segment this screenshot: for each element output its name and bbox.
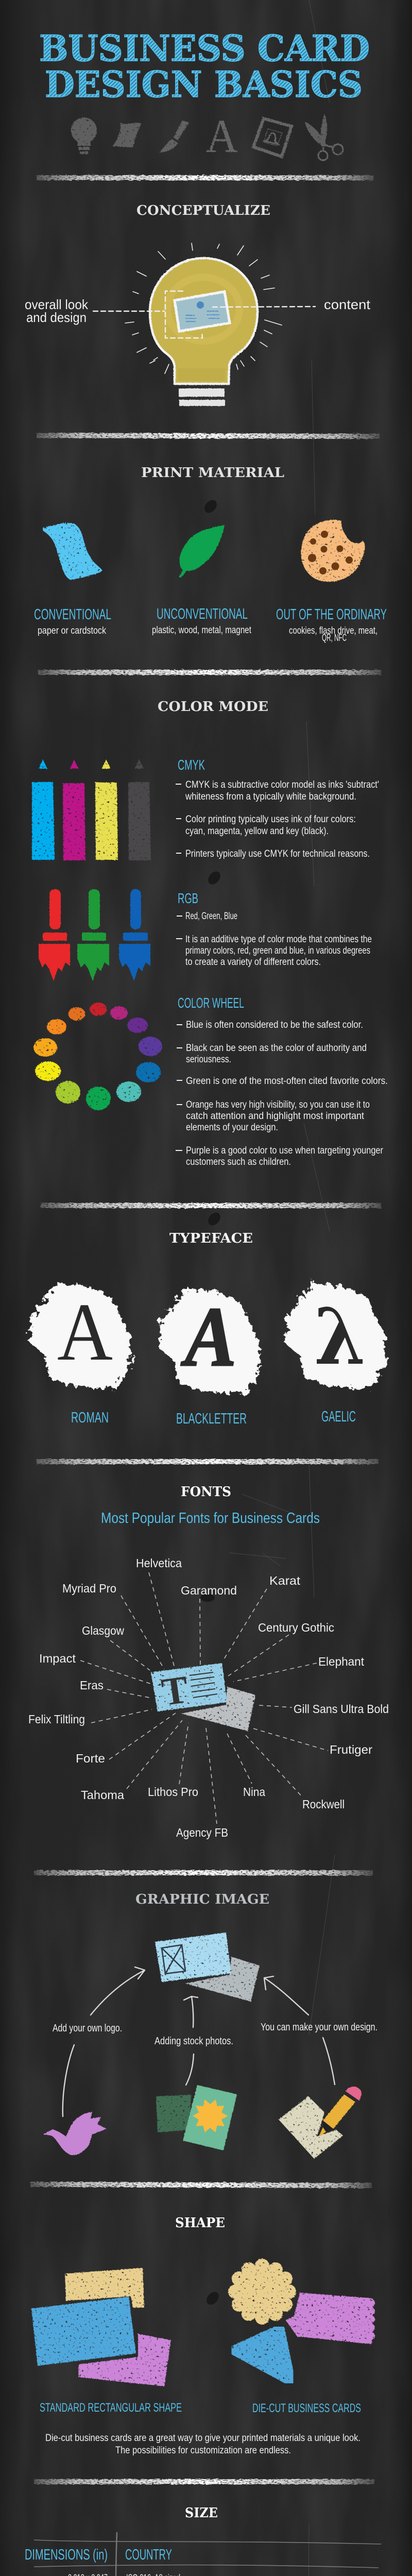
- text: color wheel: Orange has very high visibility, so you can use it to: [186, 1099, 370, 1110]
- text: RGB: [176, 890, 372, 968]
- icon: letter A: A: [206, 110, 238, 162]
- chalk blob: roman: [28, 1283, 131, 1388]
- font name labels: Tahoma: [81, 1788, 124, 1802]
- font name labels: Felix Tiltling: [28, 1713, 85, 1726]
- label: content: content: [324, 297, 371, 312]
- label: conventional: CONVENTIONAL: [34, 606, 111, 623]
- label: you can make your own design: You can make your own design.: [261, 2022, 377, 2033]
- heading: shape: SHAPE: [175, 2215, 225, 2231]
- heading: graphic image: GRAPHIC IMAGE: [135, 1892, 269, 1907]
- table rules: [34, 2532, 386, 2576]
- arrow: photos to card: [184, 1996, 198, 2085]
- font name labels: Rockwell: [302, 1798, 345, 1811]
- heading: color mode: COLOR MODE: [158, 699, 268, 715]
- label: adding stock photos: Adding stock photos.: [154, 2036, 233, 2047]
- icon: cookie: [301, 520, 365, 582]
- bulb rays: [125, 243, 282, 374]
- icon: stock photos: [156, 2085, 237, 2150]
- radial dashed lines: [80, 1572, 328, 1824]
- text block: die-cut description: [45, 2433, 360, 2456]
- label: conventional: [34, 606, 111, 636]
- card inside bulb: [175, 292, 230, 331]
- font name labels: Myriad Pro: [62, 1582, 116, 1595]
- label: gaelic: GAELIC: [321, 1409, 356, 1425]
- chalk blob: roman: A: [57, 1286, 113, 1378]
- text: CMYK: [176, 757, 379, 859]
- dashed callouts: [93, 291, 315, 338]
- panel: print material: [34, 465, 387, 643]
- font name labels: Agency FB: [176, 1826, 228, 1839]
- heading: size: SIZE: [185, 2505, 218, 2521]
- illustration: die-cut cards: [228, 2259, 375, 2380]
- text: color wheel: Black can be seen as the color of authority and: [186, 1043, 367, 1054]
- heading: conceptualize: CONCEPTUALIZE: [136, 203, 270, 218]
- label: overall look and design: overall look: [25, 297, 89, 312]
- text: CMYK: cyan, magenta, yellow and key (black).: [185, 826, 329, 837]
- panel: shape: [31, 2215, 375, 2456]
- label: out of the ordinary: cookies, flash drive, meat,: [289, 625, 377, 636]
- label: conventional: paper or cardstock: [38, 625, 106, 636]
- font name labels: [28, 1556, 389, 1839]
- label: unconventional: [152, 606, 252, 636]
- text: color wheel: catch attention and highlight most important: [186, 1111, 365, 1122]
- icon: CMYK pencils: [32, 759, 151, 860]
- icon: bird logo: [43, 2112, 107, 2155]
- text: RGB: It is an additive type of color mode that combines the: [185, 934, 372, 945]
- font name labels: Lithos Pro: [148, 1785, 198, 1799]
- text: RGB: RGB: [178, 890, 198, 906]
- arrow: logo to card: [63, 1967, 145, 2116]
- icon: business cards with T: [151, 1663, 255, 1731]
- font name labels: Eras: [80, 1679, 104, 1692]
- label: out of the ordinary: QR, NFC: [322, 633, 347, 643]
- icon row: section icons: [71, 110, 343, 162]
- icon: light bulb with business card: [150, 258, 258, 406]
- chalk blob: blackletter: A: [181, 1290, 236, 1384]
- text: color wheel: seriousness.: [186, 1054, 231, 1065]
- icon: blank business cards: [155, 1933, 260, 2002]
- table: dimensions by country: COUNTRY: [125, 2547, 172, 2563]
- text: CMYK: CMYK: [178, 757, 205, 773]
- label: overall look and design: and design: [26, 310, 87, 325]
- illustration: standard rectangular cards: [31, 2268, 171, 2386]
- text: color wheel: elements of your design.: [186, 1122, 278, 1133]
- text: color wheel: [176, 995, 388, 1167]
- arrow: design to card: [264, 1976, 335, 2084]
- icon: leaf: [179, 525, 225, 578]
- panel: size: [25, 2505, 386, 2576]
- icon: business cards with T: T: [159, 1668, 191, 1714]
- table: dimensions by country: [25, 2532, 386, 2576]
- label: add your own logo: Add your own logo.: [53, 2023, 122, 2034]
- font name labels: Elephant: [318, 1655, 365, 1668]
- text block: die-cut description: Die-cut business cards are a great way to give your printed materials a unique look.: [45, 2433, 360, 2444]
- text: color wheel: Purple is a good color to use when targeting younger: [186, 1145, 384, 1156]
- font name labels: Forte: [76, 1752, 105, 1765]
- icon: pencil and paper: [279, 2087, 362, 2159]
- font name labels: Impact: [39, 1652, 76, 1665]
- text: color wheel: Green is one of the most-often cited favorite colors.: [186, 1076, 388, 1087]
- text: color wheel: Blue is often considered to be the safest color.: [186, 1020, 363, 1030]
- label: out of the ordinary: [276, 606, 387, 643]
- icon: brush: [159, 121, 189, 152]
- heading: print material: PRINT MATERIAL: [141, 465, 284, 481]
- font name labels: Frutiger: [330, 1743, 372, 1756]
- font name labels: Century Gothic: [258, 1621, 334, 1634]
- bulb base: [179, 388, 225, 406]
- table: dimensions by country: DIMENSIONS (in): [25, 2547, 108, 2563]
- panel: typeface: [28, 1231, 386, 1427]
- panel: fonts: [28, 1484, 389, 1839]
- label: standard rectangular shape: STANDARD RECTANGULAR SHAPE: [40, 2401, 182, 2415]
- label: blackletter: BLACKLETTER: [176, 1411, 247, 1427]
- font name labels: Helvetica: [136, 1556, 182, 1570]
- icon: photo frame: [253, 118, 291, 157]
- font name labels: Garamond: [181, 1584, 237, 1597]
- font name labels: Gill Sans Ultra Bold: [294, 1702, 389, 1716]
- icon: paper: [113, 123, 142, 147]
- chalk blob: gaelic: λ: [314, 1292, 366, 1382]
- text: CMYK: Printers typically use CMYK for technical reasons.: [185, 849, 370, 859]
- label: unconventional: UNCONVENTIONAL: [157, 606, 248, 622]
- chalk blob: gaelic: [283, 1283, 386, 1388]
- text: CMYK: Color printing typically uses ink of four colors:: [185, 814, 356, 825]
- panel: conceptualize: [25, 203, 371, 406]
- icon: paper: [43, 523, 102, 580]
- chalk blob: blackletter: [157, 1288, 260, 1394]
- heading: fonts: FONTS: [181, 1484, 231, 1500]
- label: overall look and design: [25, 297, 89, 325]
- icon: RGB paintbrushes: [39, 889, 150, 981]
- text: CMYK: whiteness from a typically white background.: [185, 791, 356, 802]
- text: color wheel: COLOR WHEEL: [178, 995, 244, 1011]
- icon: scissors: [305, 114, 343, 160]
- heading: typeface: TYPEFACE: [169, 1231, 253, 1246]
- title: BUSINESS CARD: [39, 28, 370, 70]
- panel: color mode: [32, 699, 388, 1167]
- text: CMYK: CMYK is a subtractive color model as inks 'subtract': [185, 779, 379, 790]
- label: die-cut business cards: DIE-CUT BUSINESS CARDS: [252, 2401, 361, 2415]
- font name labels: Karat: [269, 1574, 301, 1587]
- title: [39, 28, 370, 106]
- subheading: most popular fonts: Most Popular Fonts for Business Cards: [101, 1510, 320, 1527]
- icon: bulb: [71, 117, 97, 154]
- text: color wheel: customers such as children.: [186, 1157, 291, 1167]
- title: DESIGN BASICS: [45, 64, 363, 106]
- panel: graphic image: [43, 1892, 377, 2159]
- text block: die-cut description: The possibilities for customization are endless.: [115, 2445, 291, 2456]
- font name labels: Glasgow: [82, 1624, 124, 1637]
- text: RGB: Red, Green, Blue: [185, 911, 237, 922]
- text: RGB: to create a variety of different colors.: [185, 957, 321, 968]
- font name labels: Nina: [243, 1785, 265, 1799]
- label: roman: ROMAN: [71, 1410, 109, 1426]
- label: unconventional: plastic, wood, metal, magnet: [152, 625, 252, 636]
- chart: color wheel: [33, 1003, 162, 1110]
